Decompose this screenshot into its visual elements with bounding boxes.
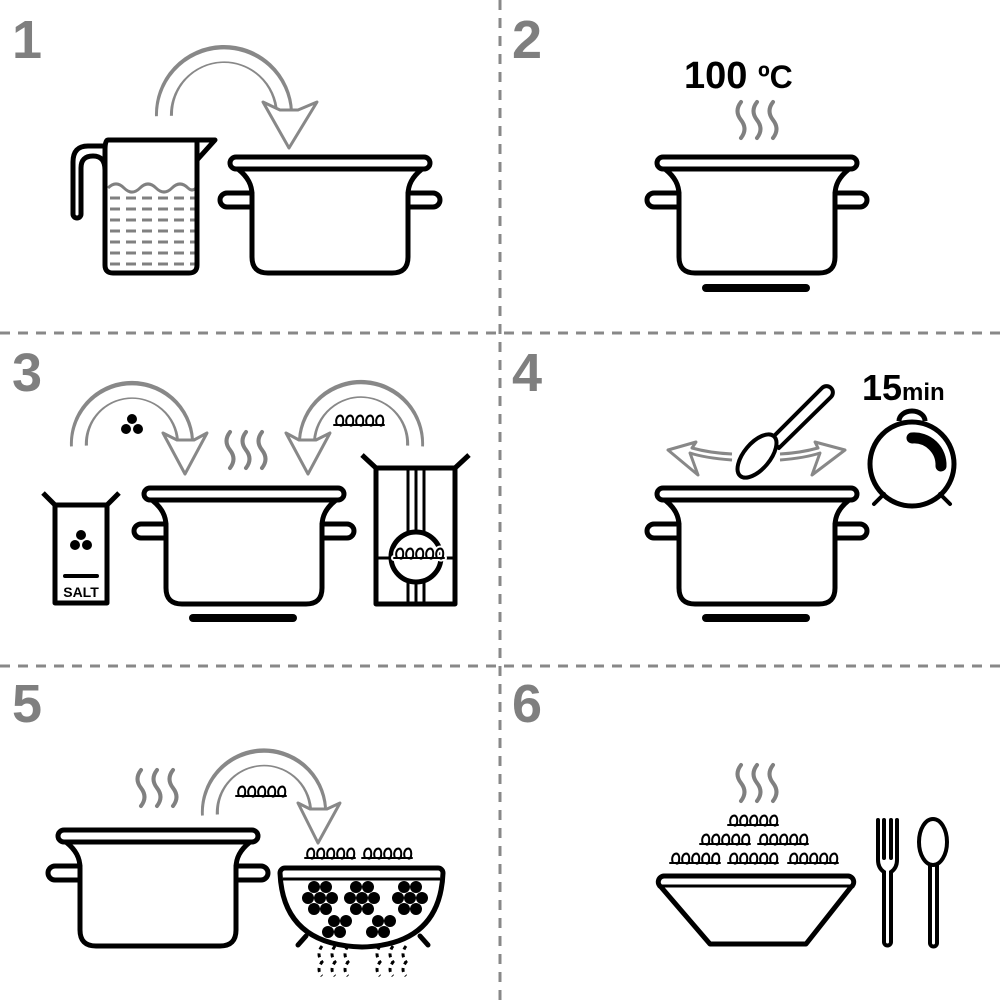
icon: bowl of pasta — [658, 816, 854, 944]
arrow: jug to pot — [164, 54, 317, 148]
icon: spoon — [919, 819, 947, 947]
step number 4: 4 — [512, 343, 542, 403]
temperature label: 100 ºC — [684, 55, 793, 97]
icon: pot on burner — [647, 157, 867, 292]
panel: step 5 — [12, 674, 443, 976]
icon: measuring jug — [73, 140, 215, 273]
arrow: pot to colander — [210, 757, 340, 843]
panel: step 1 — [12, 10, 440, 273]
icon: steam — [226, 432, 266, 468]
time label: 15min — [862, 367, 945, 408]
icon: spoon — [730, 386, 833, 484]
icon: pot — [48, 830, 268, 946]
arrows: stirring — [668, 442, 845, 475]
icon: pasta package — [362, 455, 469, 604]
icon: alarm clock — [870, 411, 954, 506]
step number 2: 2 — [512, 10, 542, 70]
icon: salt box — [43, 493, 119, 603]
step number 3: 3 — [12, 343, 42, 403]
icon: steam — [138, 770, 176, 806]
panel: step 2 — [512, 10, 867, 292]
icon: pot on burner — [134, 488, 354, 622]
icon: pot — [220, 157, 440, 273]
arrow: pasta to pot — [286, 389, 415, 474]
panel: step 6 — [512, 674, 947, 947]
icon: steam — [738, 102, 776, 138]
icon: salt box: SALT — [63, 584, 99, 600]
icon: steam — [738, 765, 776, 801]
step number 5: 5 — [12, 674, 42, 734]
icon: pot on burner — [647, 488, 867, 622]
arrow: salt to pot — [79, 390, 207, 474]
panel: step 4 — [512, 343, 954, 622]
step number 1: 1 — [12, 10, 42, 70]
step number 6: 6 — [512, 674, 542, 734]
panel: step 3 — [12, 343, 469, 622]
icon: fork — [878, 820, 897, 946]
icon: colander with pasta — [280, 849, 443, 976]
